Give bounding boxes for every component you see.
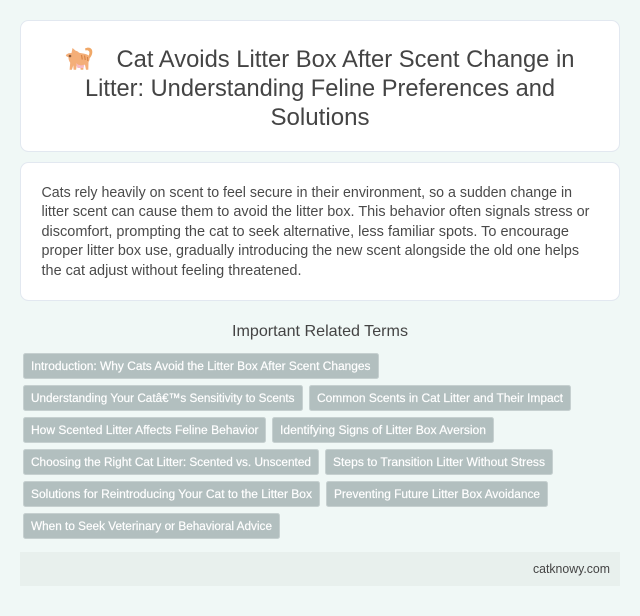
tag: steps <box>326 450 552 474</box>
description text: litter scent can cause them to avoid the litter box. This behavior often signals stress or <box>42 204 590 220</box>
tag: sensitivity <box>24 386 302 410</box>
description text: discomfort, prompting the cat to seek alternative, less familiar spots. To encourage <box>42 224 569 240</box>
icon: cat <box>66 48 92 70</box>
tag: behavior <box>24 418 266 442</box>
heading: related terms: Important Related Terms <box>232 323 408 340</box>
tag: steps: Steps to Transition Litter Without Stress <box>333 455 545 469</box>
description text: the cat adjust without feeling threatened. <box>42 263 302 279</box>
tag: solutions <box>24 482 320 506</box>
tag: choosing: Choosing the Right Cat Litter: Scented vs. Unscented <box>31 455 311 469</box>
tag: signs: Identifying Signs of Litter Box Aversion <box>280 423 486 437</box>
tag: behavior: How Scented Litter Affects Feline Behavior <box>31 423 258 437</box>
description text <box>42 185 590 279</box>
footer <box>20 552 620 586</box>
tag: preventing <box>326 482 548 506</box>
description text: proper litter box use, gradually introducing the new scent alongside the old one helps <box>42 243 579 259</box>
tag list <box>24 354 570 538</box>
tag: solutions: Solutions for Reintroducing Your Cat to the Litter Box <box>31 487 313 501</box>
tag: introduction: Introduction: Why Cats Avoid the Litter Box After Scent Changes <box>31 359 370 373</box>
title text <box>85 46 574 131</box>
tag: preventing: Preventing Future Litter Box Avoidance <box>334 487 540 501</box>
tag: signs <box>272 418 494 442</box>
tag: common scents: Common Scents in Cat Litter and Their Impact <box>317 391 564 405</box>
panel: title <box>20 20 620 152</box>
tag: sensitivity: Understanding Your Catâ€™s Sensitivity to Scents <box>31 391 294 405</box>
footer site name: catknowy.com <box>533 561 610 576</box>
description text: Cats rely heavily on scent to feel secure in their environment, so a sudden change in <box>42 185 572 201</box>
tag: advice <box>24 514 280 538</box>
tag: introduction <box>24 354 378 378</box>
title text: Solutions <box>270 104 370 131</box>
tag: common scents <box>310 386 570 410</box>
tag: advice: When to Seek Veterinary or Behavioral Advice <box>31 519 272 533</box>
panel: description <box>20 162 620 300</box>
tag: choosing <box>24 450 318 474</box>
title text: Cat Avoids Litter Box After Scent Change in <box>116 46 574 73</box>
title text: Litter: Understanding Feline Preferences and <box>85 75 555 102</box>
